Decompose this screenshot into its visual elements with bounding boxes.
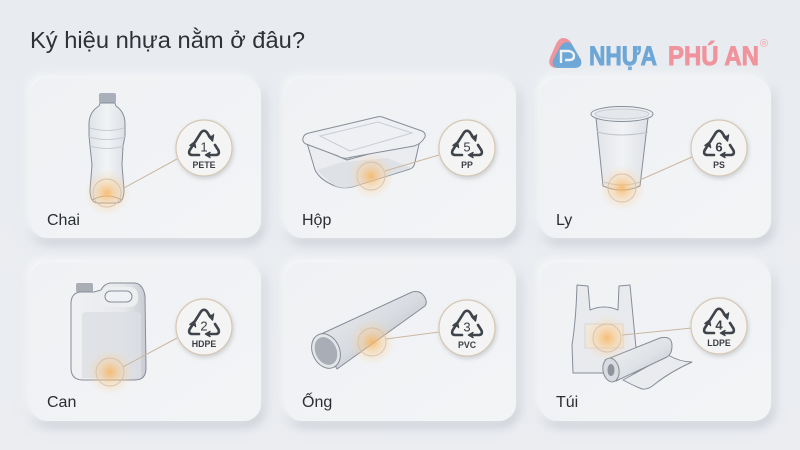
leader line bbox=[123, 338, 177, 367]
recycling badge: 3 PVC: 3 bbox=[463, 320, 471, 334]
label: Hộp bbox=[302, 212, 331, 229]
label: Can bbox=[47, 394, 76, 411]
recycling badge: 2 HDPE: 2 bbox=[200, 318, 208, 334]
logo icon bbox=[549, 38, 581, 68]
label: Ống bbox=[302, 391, 332, 411]
recycling badge: 5 PP: 5 bbox=[463, 140, 471, 154]
panel: Túi bbox=[540, 262, 771, 421]
label: Chai bbox=[47, 212, 80, 229]
highlight: box base bbox=[348, 153, 394, 199]
recycling badge: 1 PETE: PETE bbox=[193, 160, 216, 170]
highlight: pipe bbox=[349, 319, 395, 365]
recycling badge: 4 LDPE bbox=[691, 298, 747, 354]
icon: jerrycan bbox=[71, 283, 146, 380]
recycling badge: 3 PVC: PVC bbox=[458, 340, 477, 350]
label: Túi bbox=[556, 394, 578, 411]
brand name: PHÚ AN: PHÚ AN bbox=[668, 40, 759, 71]
recycling badge: 2 HDPE bbox=[176, 299, 232, 355]
recycling badge: 6 PS: 6 bbox=[715, 140, 723, 154]
panel: Ly bbox=[540, 78, 771, 238]
title: Ký hiệu nhựa nằm ở đâu? bbox=[30, 27, 305, 53]
recycling badge: 3 PVC bbox=[439, 300, 495, 356]
icon: food box bbox=[303, 117, 425, 188]
panel: Can bbox=[30, 262, 261, 421]
recycling badge: 1 PETE: 1 bbox=[200, 140, 208, 154]
highlight: bag label bbox=[584, 315, 630, 361]
panel: Ống bbox=[285, 262, 516, 421]
leader line bbox=[124, 159, 177, 188]
recycling badge: 5 PP: PP bbox=[461, 160, 473, 170]
highlight: cup base bbox=[599, 165, 645, 211]
highlight: bottle base bbox=[84, 170, 130, 216]
logo: Nhựa Phú An bbox=[549, 38, 768, 71]
leader line bbox=[622, 328, 692, 335]
panel: Chai bbox=[30, 78, 261, 238]
icon: cup bbox=[591, 106, 653, 190]
registered mark: ® bbox=[760, 38, 768, 50]
recycling badge: 4 LDPE: LDPE bbox=[707, 338, 731, 348]
icon: pipe bbox=[306, 292, 426, 373]
recycling badge: 6 PS bbox=[691, 120, 747, 176]
icon: bottle bbox=[89, 93, 125, 203]
leader line bbox=[386, 332, 439, 339]
recycling badge: 1 PETE bbox=[176, 120, 232, 176]
recycling badge: 6 PS: PS bbox=[713, 160, 725, 170]
label: Ly bbox=[556, 212, 572, 229]
icon: plastic bag and roll bbox=[572, 285, 692, 389]
brand name: NHỰA: NHỰA bbox=[589, 41, 657, 71]
highlight: can base bbox=[87, 349, 133, 395]
recycling badge: 4 LDPE: 4 bbox=[715, 318, 723, 332]
leader line bbox=[385, 155, 439, 171]
recycling badge: 2 HDPE: HDPE bbox=[192, 339, 216, 349]
panel: Hộp bbox=[285, 78, 516, 238]
leader line bbox=[640, 157, 692, 180]
recycling badge: 5 PP bbox=[439, 120, 495, 176]
